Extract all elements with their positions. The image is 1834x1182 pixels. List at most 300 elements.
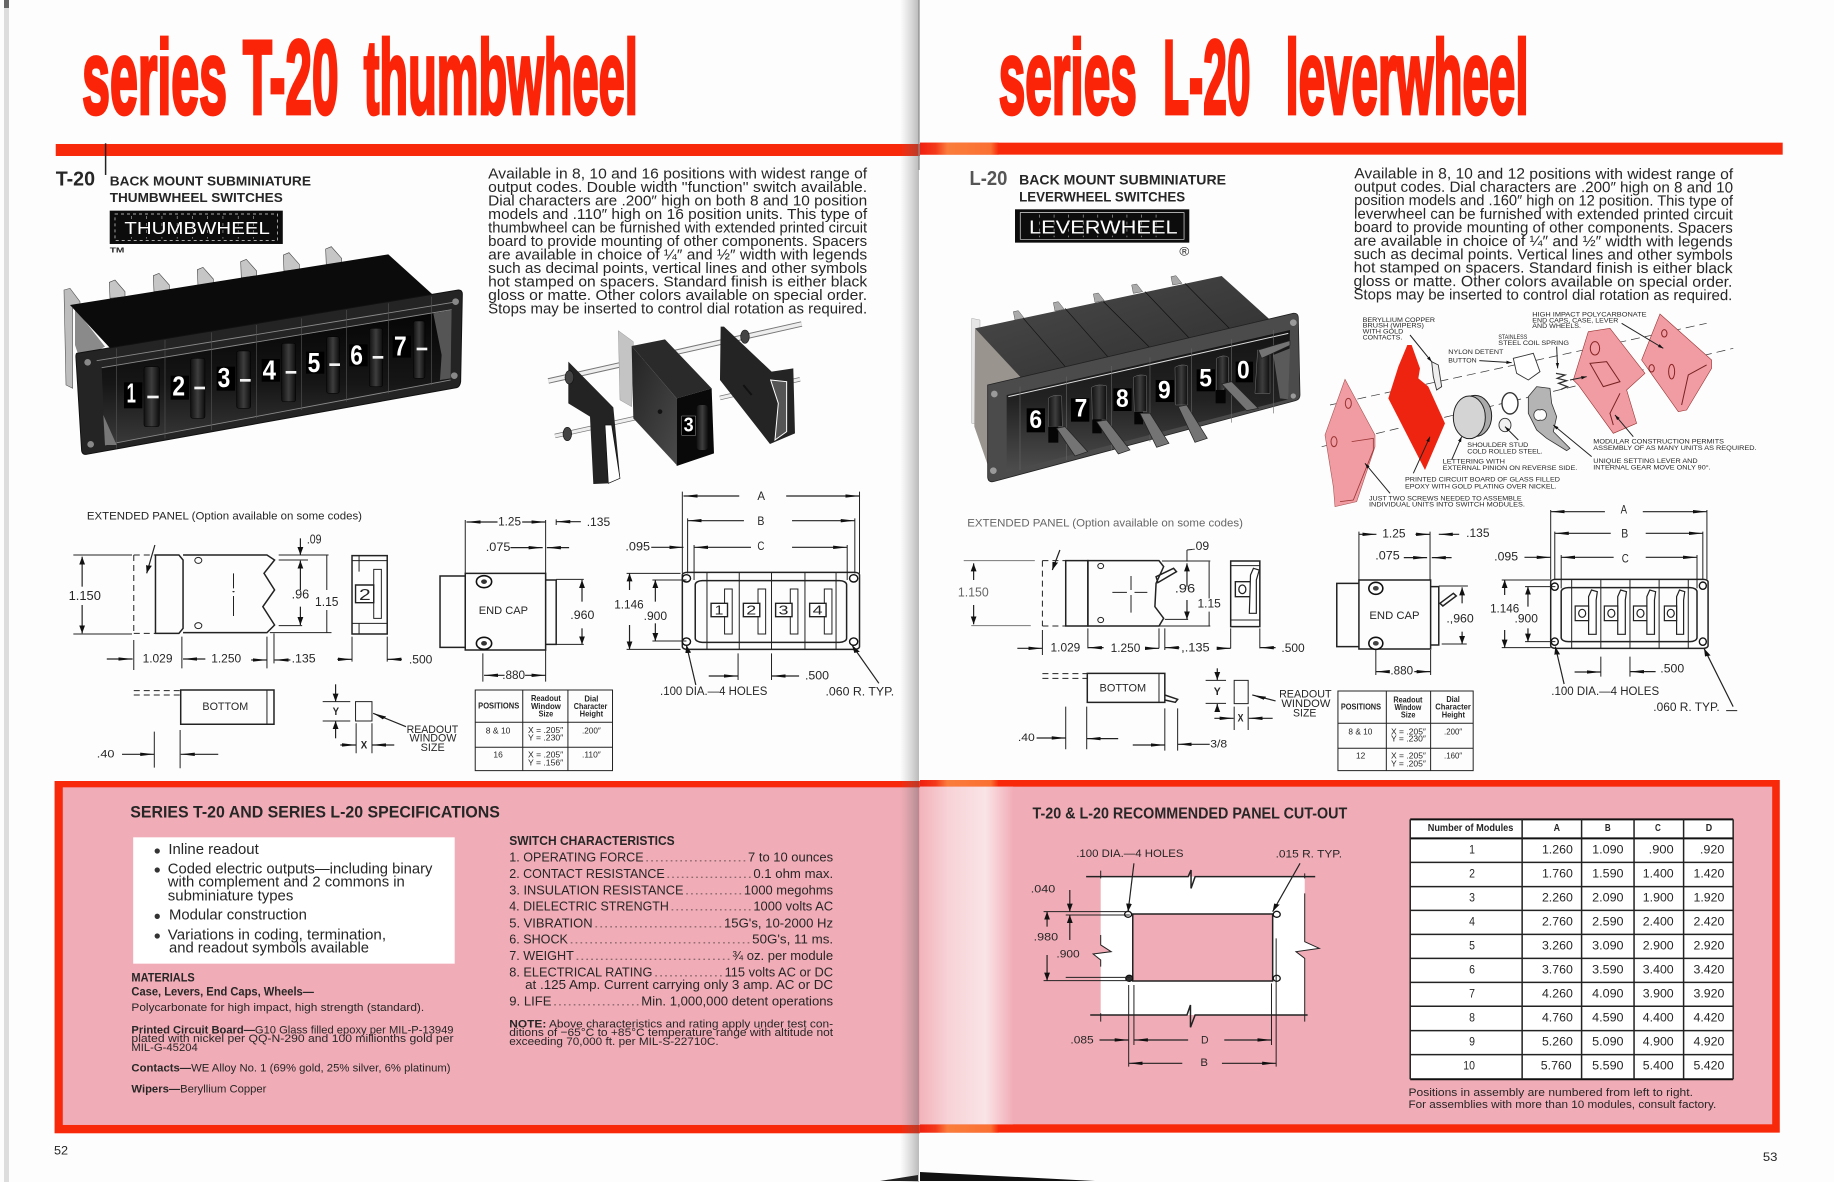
drawing: front view with digits 1-4: .060 R. TYP. bbox=[825, 684, 894, 698]
table: readout window T-20: Size bbox=[539, 709, 553, 719]
right page header bbox=[920, 19, 1783, 304]
drawing: leverwheel side view bbox=[1231, 561, 1260, 627]
heading: T-20 back mount subminiature thumbwheel switches: BACK MOUNT SUBMINIATURE bbox=[110, 174, 311, 189]
table: dimensions by number of modules: 4.760 bbox=[1542, 1011, 1573, 1024]
table: dimensions by number of modules: 4.920 bbox=[1694, 1035, 1724, 1048]
drawing: leverwheel front view with levers: B bbox=[1621, 527, 1628, 540]
drawing: front view with digits 1-4: 1.146 bbox=[614, 597, 644, 611]
part callouts: EXTERNAL PINION ON REVERSE SIDE. bbox=[1443, 466, 1578, 472]
table: readout window L-20: X = .205″ bbox=[1391, 727, 1426, 736]
page number 53: 53 bbox=[1763, 1150, 1777, 1164]
drawing: leverwheel front view with levers bbox=[1490, 503, 1737, 714]
drawing: leverwheel end cap with dimensions: .135 bbox=[1466, 526, 1489, 540]
switch characteristics list: 115 volts AC or DC bbox=[725, 965, 833, 980]
part callouts: ASSEMBLY OF AS MANY UNITS AS REQUIRED. bbox=[1593, 446, 1757, 452]
switch characteristics list: 1000 megohms bbox=[744, 883, 833, 898]
drawing: leverwheel end cap with dimensions bbox=[1337, 526, 1489, 677]
red rule right bbox=[920, 143, 1783, 155]
part: lettering wheel bbox=[1453, 395, 1492, 439]
table: dimensions by number of modules: 4.900 bbox=[1643, 1035, 1674, 1048]
drawing: front panel with dimensions: 1.150 bbox=[69, 589, 101, 603]
photo: L-20 leverwheel switch: 9 bbox=[1158, 376, 1171, 404]
drawing: readout window size: X bbox=[361, 739, 368, 751]
description paragraph left: hot stamped on spacers. Standard finish is either black bbox=[488, 273, 867, 290]
table: dimensions by number of modules: 5.590 bbox=[1592, 1059, 1624, 1072]
part callouts: END CAPS, CASE, LEVER bbox=[1532, 318, 1619, 324]
switch characteristics list: 7 to 10 ounces bbox=[748, 850, 833, 865]
table: dimensions by number of modules: B bbox=[1605, 823, 1611, 834]
drawing: front panel with dimensions: 1.250 bbox=[211, 651, 241, 665]
red rule left bbox=[56, 144, 920, 156]
caption: extended panel right: EXTENDED PANEL (Option available on some codes) bbox=[967, 517, 1243, 529]
part callouts: EPOXY WITH GOLD PLATING OVER NICKEL. bbox=[1405, 484, 1557, 490]
part: nylon detent button bbox=[1513, 353, 1540, 380]
table: dimensions by number of modules: 3.920 bbox=[1694, 987, 1724, 1000]
drawing: readout window size bbox=[323, 684, 458, 754]
part callouts: CONTACTS. bbox=[1363, 335, 1403, 341]
table: readout window T-20: Height bbox=[580, 709, 603, 719]
part: setting lever bbox=[1528, 387, 1570, 451]
part callouts: PRINTED CIRCUIT BOARD OF GLASS FILLED bbox=[1405, 478, 1561, 484]
table: readout window L-20: 12 bbox=[1356, 751, 1365, 761]
feature list box: Coded electric outputs—including binary bbox=[168, 861, 433, 877]
drawing: leverwheel readout window size: READOUT bbox=[1279, 689, 1332, 700]
table: dimensions by number of modules: 4 bbox=[1469, 915, 1475, 928]
description paragraph right bbox=[1353, 165, 1733, 304]
drawing: leverwheel front view with levers: 1.146 bbox=[1490, 602, 1519, 615]
description paragraph left: thumbwheel can be furnished with extended printed circuit bbox=[488, 219, 867, 236]
table: readout window T-20: Readout bbox=[531, 693, 561, 703]
drawing: front panel with dimensions: 1.15 bbox=[315, 595, 339, 609]
table: dimensions by number of modules: 5 bbox=[1469, 939, 1475, 952]
feature list box bbox=[133, 837, 455, 964]
description paragraph left: models and .110″ high on 16 position units. This type of bbox=[488, 206, 867, 222]
table: readout window T-20 bbox=[475, 690, 613, 771]
materials text block: MIL-G-45204 bbox=[131, 1041, 198, 1054]
scan shading at gutter and page edges bbox=[4, 0, 1095, 1182]
table: dimensions by number of modules: 5.420 bbox=[1694, 1059, 1724, 1072]
left page header bbox=[56, 18, 920, 317]
part: end cap right bbox=[1642, 314, 1712, 412]
switch characteristics list: .............. bbox=[654, 965, 723, 980]
drawing: leverwheel readout window size: SIZE bbox=[1293, 708, 1316, 719]
drawing: panel cut-out bbox=[1031, 847, 1342, 1069]
drawing: end cap with dimensions: 1.25 bbox=[498, 514, 521, 528]
table: dimensions by number of modules: 2.420 bbox=[1694, 915, 1724, 928]
table: dimensions by number of modules: .920 bbox=[1700, 843, 1724, 856]
drawing: end cap with dimensions: END CAP bbox=[479, 605, 528, 617]
part callouts: INDIVIDUAL UNITS INTO SWITCH MODULES. bbox=[1369, 503, 1525, 509]
drawing: leverwheel bottom view bbox=[1018, 673, 1227, 751]
table: readout window L-20: .160″ bbox=[1444, 751, 1462, 761]
table: readout window L-20: Window bbox=[1394, 702, 1422, 712]
materials text block: MATERIALS bbox=[131, 970, 195, 984]
heading: L-20 back mount subminiature leverwheel switches bbox=[970, 167, 1226, 205]
heading: L-20 back mount subminiature leverwheel switches: LEVERWHEEL SWITCHES bbox=[1019, 189, 1185, 205]
photo: L-20 leverwheel switch bbox=[972, 276, 1300, 482]
table: dimensions by number of modules: 1.260 bbox=[1542, 843, 1573, 856]
table: dimensions by number of modules: Number of Modules bbox=[1428, 823, 1513, 834]
part callouts: JUST TWO SCREWS NEEDED TO ASSEMBLE bbox=[1369, 497, 1522, 503]
photo: L-20 leverwheel switch: 5 bbox=[1199, 365, 1212, 393]
title: series T-20 thumbwheel: T-20 bbox=[243, 18, 339, 136]
description paragraph left: Stops may be inserted to control dial rotation as required. bbox=[488, 300, 867, 317]
drawing: front panel with dimensions bbox=[69, 532, 432, 670]
photo: T-20 thumbwheel switch: 1 bbox=[127, 377, 136, 408]
drawing: front view with digits 1-4: A bbox=[757, 489, 765, 503]
note text block bbox=[509, 1018, 833, 1048]
drawing: side view with readout 2: 2 bbox=[359, 586, 371, 603]
drawing: leverwheel readout window size: WINDOW bbox=[1281, 698, 1331, 710]
drawing: leverwheel front panel with dimensions: 1.15 bbox=[1197, 597, 1221, 610]
heading: T-20 back mount subminiature thumbwheel switches: THUMBWHEEL SWITCHES bbox=[110, 191, 283, 205]
table: dimensions by number of modules: 2.590 bbox=[1592, 915, 1624, 928]
drawing: bottom view: .40 bbox=[97, 748, 114, 760]
heading: T-20 back mount subminiature thumbwheel switches: T-20 bbox=[56, 167, 95, 191]
part callouts: WITH GOLD bbox=[1363, 329, 1404, 335]
table: readout window L-20: Height bbox=[1442, 710, 1465, 719]
photo: exploded T-20 module bbox=[548, 324, 802, 484]
drawing: readout window size: WINDOW bbox=[410, 733, 457, 744]
switch characteristics list bbox=[509, 834, 833, 1009]
table: dimensions by number of modules: 4.420 bbox=[1694, 1011, 1724, 1024]
drawing: leverwheel end cap with dimensions: 1.25 bbox=[1382, 527, 1406, 540]
heading: specifications: SERIES T-20 AND SERIES L-20 SPECIFICATIONS bbox=[130, 803, 500, 822]
switch characteristics list: .......................... bbox=[594, 916, 723, 931]
drawing: leverwheel front view with levers: .060 R. TYP. bbox=[1653, 700, 1720, 714]
table: dimensions by number of modules bbox=[1410, 819, 1733, 1079]
switch characteristics list: 3. INSULATION RESISTANCE bbox=[509, 883, 684, 898]
drawing: leverwheel end cap with dimensions: .880 bbox=[1390, 664, 1413, 677]
logo: LEVERWHEEL: LEVERWHEEL bbox=[1029, 216, 1178, 238]
switch characteristics list: SWITCH CHARACTERISTICS bbox=[509, 834, 675, 848]
switch characteristics list: 0.1 ohm max. bbox=[753, 867, 833, 881]
logo: LEVERWHEEL bbox=[1015, 209, 1189, 243]
feature list box: Inline readout bbox=[168, 841, 259, 857]
table: readout window T-20: 8 & 10 bbox=[486, 726, 511, 735]
drawing: leverwheel front view with levers: .095 bbox=[1494, 550, 1518, 563]
table: dimensions by number of modules: 9 bbox=[1469, 1035, 1475, 1048]
switch characteristics list: 8. ELECTRICAL RATING bbox=[509, 965, 652, 980]
photo: T-20 thumbwheel switch: 6 bbox=[350, 339, 363, 370]
table: dimensions by number of modules: 6 bbox=[1469, 963, 1475, 976]
drawing: leverwheel front panel with dimensions: 1.250 bbox=[1111, 641, 1140, 655]
description paragraph left: board to provide mounting of other components. Spacers bbox=[488, 233, 867, 249]
table: dimensions by number of modules: 2.260 bbox=[1542, 891, 1573, 904]
materials text block: Printed Circuit Board—G10 Glass filled epoxy per MIL-P-13949 bbox=[131, 1024, 454, 1036]
drawing: leverwheel front panel with dimensions: 1.029 bbox=[1051, 641, 1080, 654]
drawing: end cap with dimensions: .960 bbox=[570, 608, 594, 622]
drawing: front view with digits 1-4: 2 bbox=[746, 603, 756, 618]
table: dimensions by number of modules: 1.760 bbox=[1542, 867, 1573, 880]
feature list box: subminiature types bbox=[168, 888, 293, 904]
drawing: leverwheel end cap with dimensions: END CAP bbox=[1369, 610, 1420, 622]
part callouts bbox=[1363, 313, 1757, 509]
part callouts: BUTTON bbox=[1448, 359, 1477, 365]
table: readout window L-20: Readout bbox=[1393, 695, 1422, 704]
table: readout window T-20: POSITIONS bbox=[478, 701, 519, 710]
drawing: leverwheel front panel with dimensions: .09 bbox=[1192, 539, 1209, 553]
drawing: leverwheel bottom view: .40 bbox=[1018, 731, 1035, 744]
part: end cap left bbox=[1325, 379, 1375, 507]
photo: L-20 leverwheel switch: 0 bbox=[1237, 357, 1250, 385]
photo: T-20 thumbwheel switch: 4 bbox=[263, 355, 276, 386]
drawing: front panel with dimensions: .135 bbox=[292, 651, 316, 665]
part callouts: BRUSH (WIPERS) bbox=[1363, 324, 1424, 330]
table: readout window T-20: Character bbox=[574, 701, 607, 711]
switch characteristics list: 6. SHOCK bbox=[509, 932, 568, 947]
table: dimensions by number of modules: 3.760 bbox=[1542, 963, 1573, 976]
logo: THUMBWHEEL: THUMBWHEEL bbox=[124, 219, 270, 238]
table: dimensions by number of modules: 4.260 bbox=[1542, 987, 1573, 1000]
table: dimensions by number of modules: 2 bbox=[1469, 867, 1475, 880]
drawing: front view with digits 1-4: .900 bbox=[644, 609, 667, 623]
table: readout window T-20: .200″ bbox=[582, 726, 601, 735]
table: readout window T-20: .110″ bbox=[582, 750, 601, 760]
drawing: front view with digits 1-4: 3 bbox=[779, 603, 789, 618]
table: dimensions by number of modules: 2.400 bbox=[1643, 915, 1674, 928]
exploded diagram: leverwheel parts bbox=[1322, 313, 1757, 509]
right page technical drawings bbox=[958, 503, 1737, 771]
feature list box: Modular construction bbox=[169, 907, 307, 923]
note text block: exceeding 70,000 ft. per MIL-S-22710C. bbox=[509, 1035, 719, 1048]
table: readout window L-20: POSITIONS bbox=[1341, 702, 1381, 712]
description paragraph left bbox=[488, 165, 867, 317]
drawing: front view with digits 1-4 bbox=[614, 489, 894, 698]
part callouts: LETTERING WITH bbox=[1443, 459, 1505, 465]
heading: recommended panel cut-out: T-20 & L-20 RECOMMENDED PANEL CUT-OUT bbox=[1032, 804, 1347, 822]
drawing: leverwheel bottom view: 3/8 bbox=[1210, 737, 1227, 750]
drawing: panel cut-out: .980 bbox=[1034, 930, 1058, 943]
part callouts: STEEL COIL SPRING bbox=[1498, 341, 1569, 347]
table: readout window L-20: Size bbox=[1401, 710, 1416, 719]
drawing: end cap with dimensions: .135 bbox=[587, 515, 610, 529]
table: readout window T-20: X = .205″ bbox=[528, 725, 563, 735]
table: dimensions by number of modules: .900 bbox=[1649, 843, 1674, 856]
switch characteristics list: .................. bbox=[553, 994, 640, 1009]
drawing: leverwheel end cap with dimensions: .075 bbox=[1375, 549, 1400, 562]
switch characteristics list: Min. 1,000,000 detent operations bbox=[641, 994, 833, 1009]
switch characteristics list: ..................................... bbox=[569, 932, 751, 947]
table: dimensions by number of modules: 3.420 bbox=[1694, 963, 1724, 976]
photo: T-20 thumbwheel switch bbox=[64, 247, 462, 454]
photo: T-20 thumbwheel switch: 5 bbox=[308, 347, 320, 378]
drawing: panel cut-out: B bbox=[1200, 1056, 1208, 1069]
drawing: leverwheel readout window size: Y bbox=[1214, 686, 1221, 698]
table: dimensions by number of modules: 7 bbox=[1469, 987, 1475, 1000]
materials text block: Wipers—Beryllium Copper bbox=[131, 1083, 267, 1095]
switch characteristics list: ................................ bbox=[575, 949, 731, 963]
drawing: panel cut-out: .085 bbox=[1070, 1033, 1094, 1046]
table footnote bbox=[1408, 1086, 1716, 1111]
switch characteristics list: 7. WEIGHT bbox=[509, 949, 574, 963]
switch characteristics list: .................. bbox=[666, 867, 752, 881]
drawing: leverwheel front view with levers: C bbox=[1622, 552, 1629, 565]
drawing: side view with readout 2 bbox=[352, 556, 387, 634]
table: dimensions by number of modules: 4.400 bbox=[1643, 1011, 1674, 1024]
switch characteristics list: ..................... bbox=[645, 850, 747, 865]
drawing: front view with digits 1-4: C bbox=[757, 539, 764, 553]
table: dimensions by number of modules: 4.090 bbox=[1592, 987, 1624, 1000]
drawing: front panel with dimensions: .500 bbox=[409, 652, 432, 666]
table: readout window T-20: 16 bbox=[493, 750, 503, 760]
drawing: panel cut-out: .100 DIA.—4 HOLES bbox=[1076, 847, 1184, 860]
panel background left bbox=[55, 781, 920, 1133]
logo: THUMBWHEEL bbox=[110, 211, 283, 244]
table: readout window L-20: X = .205″ bbox=[1391, 751, 1426, 761]
switch characteristics list: 5. VIBRATION bbox=[509, 916, 593, 931]
switch characteristics list: 50G's, 11 ms. bbox=[752, 932, 833, 947]
table: dimensions by number of modules: 3 bbox=[1469, 891, 1475, 904]
drawing: readout window size: READOUT bbox=[407, 724, 458, 736]
photo: L-20 leverwheel switch: 8 bbox=[1116, 385, 1129, 413]
description paragraph left: gloss or matte. Other colors available on special order. bbox=[488, 287, 867, 303]
description paragraph left: are available in choice of ¼″ and ½″ width with legends bbox=[488, 246, 867, 263]
part callouts: SHOULDER STUD bbox=[1467, 443, 1529, 449]
photo: L-20 leverwheel switch: 6 bbox=[1029, 406, 1042, 434]
dashed assembly axes bbox=[1322, 323, 1733, 447]
table: readout window T-20: Y = .156″ bbox=[528, 758, 563, 768]
drawing: leverwheel front panel with dimensions: .500 bbox=[1281, 641, 1305, 655]
drawing: end cap with dimensions bbox=[440, 514, 610, 682]
table: readout window T-20: Y = .230″ bbox=[528, 733, 563, 743]
left page technical drawings bbox=[69, 489, 894, 771]
description paragraph left: such as decimal points, vertical lines and other symbols bbox=[488, 260, 867, 276]
drawing: panel cut-out: D bbox=[1201, 1033, 1209, 1046]
materials text block: plated with nickel per QQ-N-290 and 100 millionths gold per bbox=[131, 1032, 454, 1045]
drawing: leverwheel bottom view: BOTTOM bbox=[1100, 682, 1146, 694]
drawing: front view with digits 1-4: B bbox=[757, 514, 764, 528]
panel: panel cut-out and dimensions bbox=[920, 780, 1780, 1164]
registered mark: ® bbox=[1179, 245, 1190, 258]
table: dimensions by number of modules: 3.400 bbox=[1643, 963, 1674, 976]
table: dimensions by number of modules: 5.090 bbox=[1592, 1035, 1624, 1048]
part callouts: UNIQUE SETTING LEVER AND bbox=[1593, 459, 1698, 465]
table: dimensions by number of modules: C bbox=[1655, 823, 1661, 834]
part: coil spring bbox=[1556, 373, 1567, 389]
drawing: leverwheel front panel with dimensions: 1.150 bbox=[958, 585, 989, 600]
description paragraph left: Dial characters are .200″ high on both 8 and 10 position bbox=[488, 192, 867, 209]
feature list box: with complement and 2 commons in bbox=[167, 874, 405, 890]
switch characteristics list: ............ bbox=[685, 883, 743, 898]
switch characteristics list: 1. OPERATING FORCE bbox=[509, 850, 644, 865]
heading: L-20 back mount subminiature leverwheel switches: L-20 bbox=[970, 167, 1007, 190]
table: dimensions by number of modules: 2.920 bbox=[1694, 939, 1724, 952]
left page header: thumbwheel bbox=[364, 18, 638, 136]
note text block: ditions of −65°C to +85°C temperature range with altitude not bbox=[509, 1026, 833, 1039]
drawing: readout window size: Y bbox=[333, 706, 339, 718]
part callouts: BERYLLIUM COPPER bbox=[1363, 318, 1436, 324]
table: dimensions by number of modules: 1.920 bbox=[1694, 891, 1724, 904]
photo: T-20 thumbwheel switch: 7 bbox=[394, 331, 407, 362]
table: dimensions by number of modules: 3.090 bbox=[1592, 939, 1624, 952]
photo: exploded T-20 module: 3 bbox=[684, 414, 694, 436]
table: dimensions by number of modules: 2.900 bbox=[1643, 939, 1674, 952]
switch characteristics list: 4. DIELECTRIC STRENGTH bbox=[509, 899, 669, 914]
description paragraph left: output codes. Double width ''function'' switch available. bbox=[488, 179, 867, 195]
feature list box: Variations in coding, termination, bbox=[168, 927, 386, 943]
drawing: front panel with dimensions: 1.029 bbox=[143, 651, 172, 665]
note text block: NOTE: Above characteristics and rating apply under test con- bbox=[509, 1018, 833, 1030]
part: shoulder stud bbox=[1499, 418, 1511, 432]
drawing: leverwheel front view with levers: A bbox=[1621, 503, 1627, 516]
table: dimensions by number of modules: 1.420 bbox=[1694, 867, 1724, 880]
switch characteristics list: 1000 volts AC bbox=[753, 899, 833, 914]
table: dimensions by number of modules: 3.590 bbox=[1592, 963, 1624, 976]
table: dimensions by number of modules: 1.900 bbox=[1643, 891, 1674, 904]
materials text block bbox=[131, 970, 454, 1095]
table: readout window L-20: Dial bbox=[1446, 694, 1460, 704]
title: series L-20 leverwheel: L-20 bbox=[1163, 19, 1251, 136]
switch characteristics list: at .125 Amp. Current carrying only 3 amp. AC or DC bbox=[525, 978, 833, 992]
table: dimensions by number of modules: 1.590 bbox=[1592, 867, 1624, 880]
materials text block: Case, Levers, End Caps, Wheels— bbox=[131, 984, 314, 998]
table: dimensions by number of modules: 3.900 bbox=[1643, 987, 1674, 1000]
panel background right bbox=[920, 780, 1780, 1133]
part: case body bbox=[1573, 328, 1645, 433]
drawing: leverwheel front panel with dimensions: ,.135 bbox=[1181, 641, 1210, 654]
photo: L-20 leverwheel switch: 7 bbox=[1075, 395, 1087, 423]
drawing: leverwheel front view with levers: .100 DIA.—4 HOLES bbox=[1551, 684, 1659, 698]
drawing: leverwheel readout window size: X bbox=[1238, 713, 1244, 724]
drawing: leverwheel front panel with dimensions: .96 bbox=[1175, 582, 1195, 595]
table: dimensions by number of modules: 1 bbox=[1469, 843, 1475, 856]
part callouts: COLD ROLLED STEEL. bbox=[1467, 449, 1543, 455]
table: readout window L-20: Y = .230″ bbox=[1391, 734, 1426, 744]
description paragraph left: Available in 8, 10 and 16 positions with widest range of bbox=[488, 165, 867, 182]
part callouts: STAINLESS bbox=[1498, 335, 1527, 341]
switch characteristics list: 9. LIFE bbox=[509, 994, 551, 1009]
switch characteristics list: 15G's, 10-2000 Hz bbox=[724, 916, 833, 931]
table: dimensions by number of modules: 10 bbox=[1463, 1059, 1475, 1072]
table: dimensions by number of modules: 5.760 bbox=[1541, 1059, 1572, 1072]
table: readout window T-20: Window bbox=[531, 701, 561, 711]
table: dimensions by number of modules: 4.590 bbox=[1592, 1011, 1624, 1024]
drawing: front view with digits 1-4: .095 bbox=[625, 539, 650, 553]
title: series T-20 thumbwheel: series bbox=[82, 18, 227, 136]
table: dimensions by number of modules: 1.090 bbox=[1592, 843, 1624, 856]
leader arrows bbox=[1365, 323, 1663, 493]
table: dimensions by number of modules: 8 bbox=[1469, 1011, 1475, 1024]
drawing: leverwheel front panel with dimensions bbox=[958, 539, 1305, 655]
heading: T-20 back mount subminiature thumbwheel switches bbox=[56, 143, 311, 205]
drawing: front view with digits 1-4: 1 bbox=[715, 603, 723, 618]
table: readout window L-20: 8 & 10 bbox=[1348, 727, 1373, 736]
trademark: TM bbox=[110, 247, 125, 254]
drawing: panel cut-out: .015 R. TYP. bbox=[1276, 847, 1342, 860]
heading: L-20 back mount subminiature leverwheel switches: BACK MOUNT SUBMINIATURE bbox=[1019, 172, 1226, 188]
drawing: end cap with dimensions: .880 bbox=[502, 668, 525, 682]
panel: specifications bbox=[54, 781, 920, 1157]
photo: T-20 thumbwheel switch: 2 bbox=[172, 371, 185, 402]
feature list box: and readout symbols available bbox=[169, 940, 369, 956]
drawing: front view with digits 1-4: .500 bbox=[805, 668, 829, 682]
part callouts: MODULAR CONSTRUCTION PERMITS bbox=[1593, 439, 1724, 445]
drawing: bottom view bbox=[97, 690, 274, 768]
drawing: bottom view: BOTTOM bbox=[202, 701, 248, 713]
caption: extended panel: EXTENDED PANEL (Option available on some codes) bbox=[87, 510, 362, 522]
table: readout window L-20: Y = .205″ bbox=[1391, 759, 1426, 769]
table: readout window L-20 bbox=[1338, 691, 1473, 771]
drawing: panel cut-out: .900 bbox=[1056, 947, 1080, 960]
drawing: leverwheel readout window size bbox=[1206, 668, 1332, 730]
table: readout window T-20: X = .205″ bbox=[528, 750, 563, 759]
drawing: front panel with dimensions: .09 bbox=[307, 532, 322, 547]
drawing: front panel with dimensions: .96 bbox=[292, 587, 309, 602]
table: dimensions by number of modules: D bbox=[1706, 823, 1712, 834]
switch characteristics list: ................. bbox=[670, 899, 752, 914]
drawing: leverwheel end cap with dimensions: .,960 bbox=[1446, 612, 1474, 625]
